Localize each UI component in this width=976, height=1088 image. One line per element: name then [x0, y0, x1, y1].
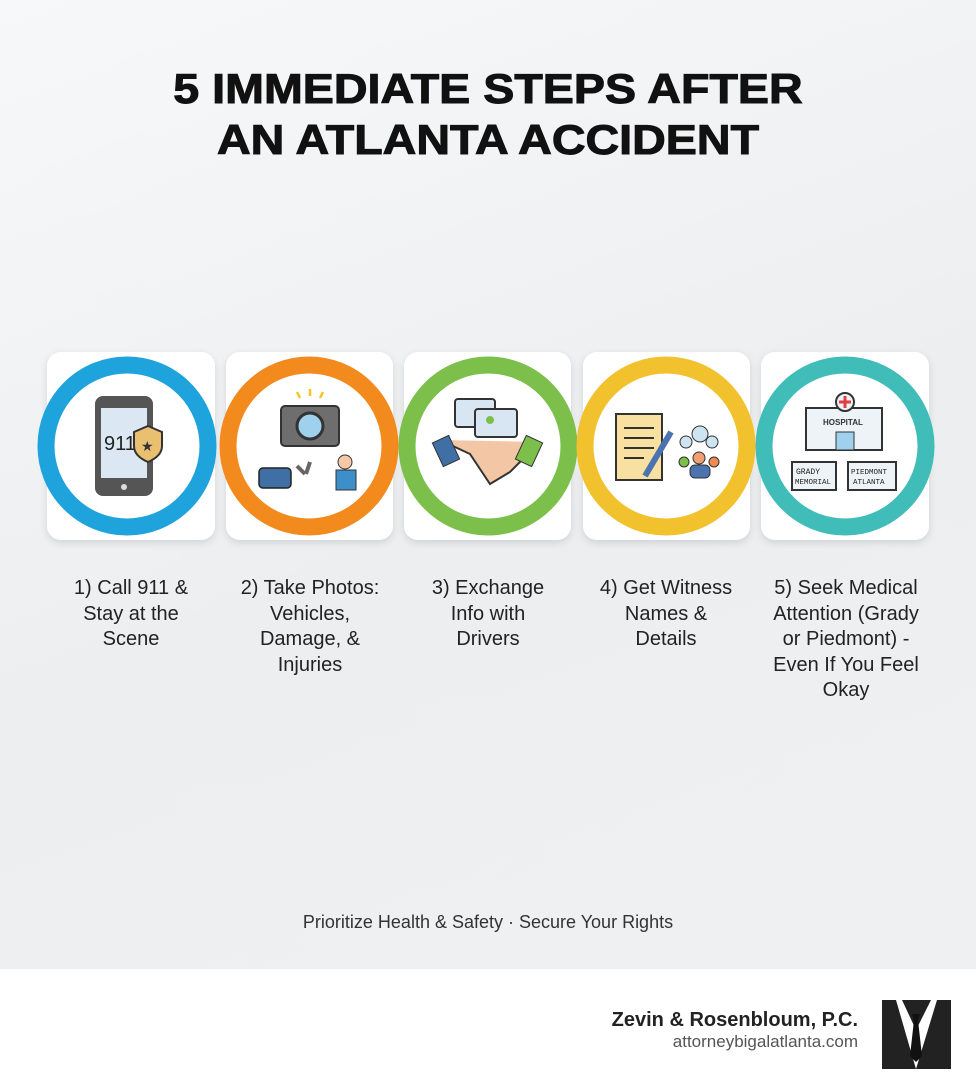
label 2 [241, 577, 379, 676]
icon: hospital: PIEDMONT [851, 469, 888, 477]
label 4: Names & [625, 602, 707, 624]
website: attorneybigalatlanta.com [673, 1032, 858, 1051]
label 4 [600, 577, 732, 650]
label 1 [74, 577, 188, 650]
label 1: Scene [103, 628, 159, 650]
label 5: or Piedmont) - [783, 628, 909, 650]
icon: hospital: ATLANTA [853, 479, 885, 487]
title [173, 65, 803, 163]
card 5 [761, 352, 929, 540]
icon: handshake and ID cards [432, 399, 543, 484]
card 1 [46, 352, 215, 540]
label 3 [432, 577, 544, 650]
label 2: Vehicles, [270, 602, 350, 624]
label 2: 2) Take Photos: [241, 577, 379, 599]
icon: camera and damage [259, 389, 356, 490]
label 1: 1) Call 911 & [74, 577, 188, 599]
firm name: Zevin & Rosenbloum, P.C. [612, 1009, 858, 1031]
icon: hospital [792, 393, 896, 490]
card 4 [583, 352, 750, 540]
icon: phone 911 [95, 396, 162, 496]
label 5: 5) Seek Medical [774, 577, 918, 599]
icon: hospital: HOSPITAL [823, 418, 863, 427]
label 3: Info with [451, 602, 525, 624]
steps diagram [38, 352, 934, 546]
title: 5 IMMEDIATE STEPS AFTER [173, 65, 803, 112]
label 5: Attention (Grady [773, 602, 919, 624]
icon: phone 911: ★ [141, 438, 154, 454]
label 5: Even If You Feel [773, 654, 919, 676]
label 1: Stay at the [83, 602, 179, 624]
footer [0, 969, 976, 1088]
label 4: 4) Get Witness [600, 577, 732, 599]
icon: hospital: GRADY [796, 468, 820, 477]
card 2 [226, 352, 393, 540]
label 2: Injuries [278, 654, 342, 676]
tagline: Prioritize Health & Safety · Secure Your Rights [303, 912, 673, 932]
card 3 [404, 352, 571, 540]
label 5: Okay [823, 679, 869, 701]
label 5 [773, 577, 919, 701]
label 4: Details [635, 628, 697, 650]
label 3: Drivers [456, 628, 520, 650]
icon: hospital: MEMORIAL [795, 479, 832, 487]
label 2: Damage, & [260, 628, 360, 650]
title: AN ATLANTA ACCIDENT [217, 116, 759, 163]
icon: notepad and witnesses [616, 414, 719, 480]
label 3: 3) Exchange [432, 577, 544, 599]
icon: phone 911: 911 [104, 433, 136, 455]
logo: suit [882, 1000, 951, 1069]
